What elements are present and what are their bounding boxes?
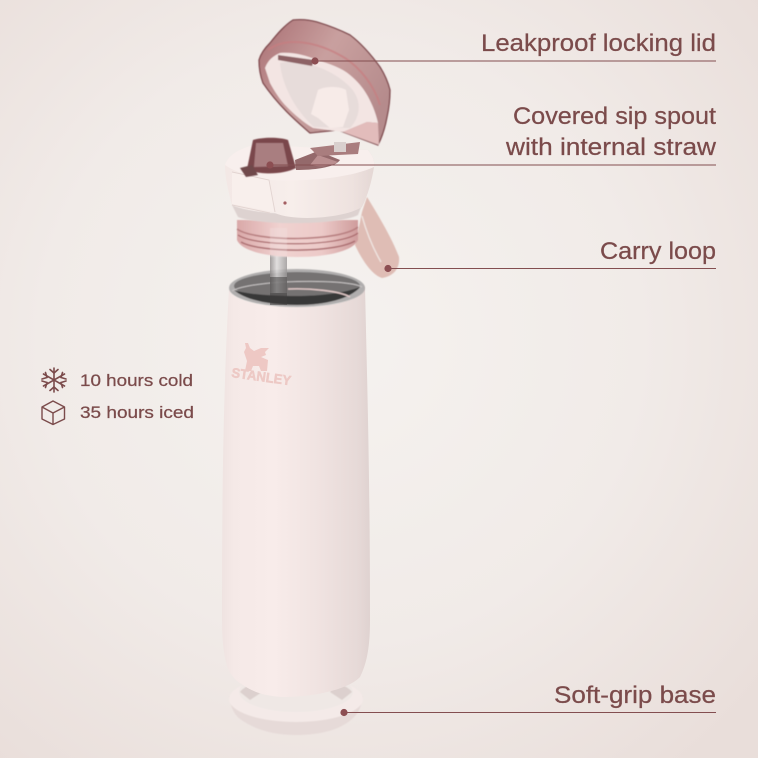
open lid xyxy=(259,20,390,145)
text: 10 hours cold: 10 hours cold xyxy=(80,371,193,390)
callout: leakproof locking lid xyxy=(311,30,716,65)
icon: ice cube xyxy=(42,401,64,424)
callout: carry loop xyxy=(384,238,716,272)
callout: soft-grip base xyxy=(340,682,716,716)
threaded neck xyxy=(237,220,358,257)
latch panel xyxy=(232,172,274,212)
bottle xyxy=(222,269,370,697)
carry loop xyxy=(355,197,399,278)
spout channel xyxy=(295,151,340,170)
callout: soft-grip base: Soft-grip base xyxy=(554,682,716,709)
sip block xyxy=(311,87,349,128)
lid rim highlights xyxy=(268,42,380,105)
straw xyxy=(270,225,287,305)
cap body xyxy=(225,145,374,218)
text: 35 hours iced: 35 hours iced xyxy=(80,403,194,422)
lid cap xyxy=(225,138,374,223)
lid outer glass xyxy=(259,20,390,145)
cap top surface xyxy=(225,145,374,180)
lid inner xyxy=(265,53,378,132)
Stanley logo xyxy=(231,343,292,388)
callout: covered sip spout xyxy=(266,103,717,169)
sip spout xyxy=(240,138,296,177)
inner glass seal xyxy=(278,55,314,66)
soft-grip base ring xyxy=(229,672,363,735)
callout: covered sip spout: Covered sip spout xyxy=(513,103,716,130)
hinge xyxy=(310,142,360,156)
bottle body xyxy=(222,285,370,697)
wordmark: STANLEY xyxy=(231,365,292,388)
callout: carry loop: Carry loop xyxy=(600,238,716,265)
bear and wings mark xyxy=(244,343,269,371)
icon: snowflake xyxy=(42,368,66,392)
callout: leakproof locking lid: Leakproof locking lid xyxy=(481,30,716,57)
callout: covered sip spout: with internal straw xyxy=(505,134,717,161)
cap collar xyxy=(232,205,362,223)
bottle opening xyxy=(229,269,365,307)
